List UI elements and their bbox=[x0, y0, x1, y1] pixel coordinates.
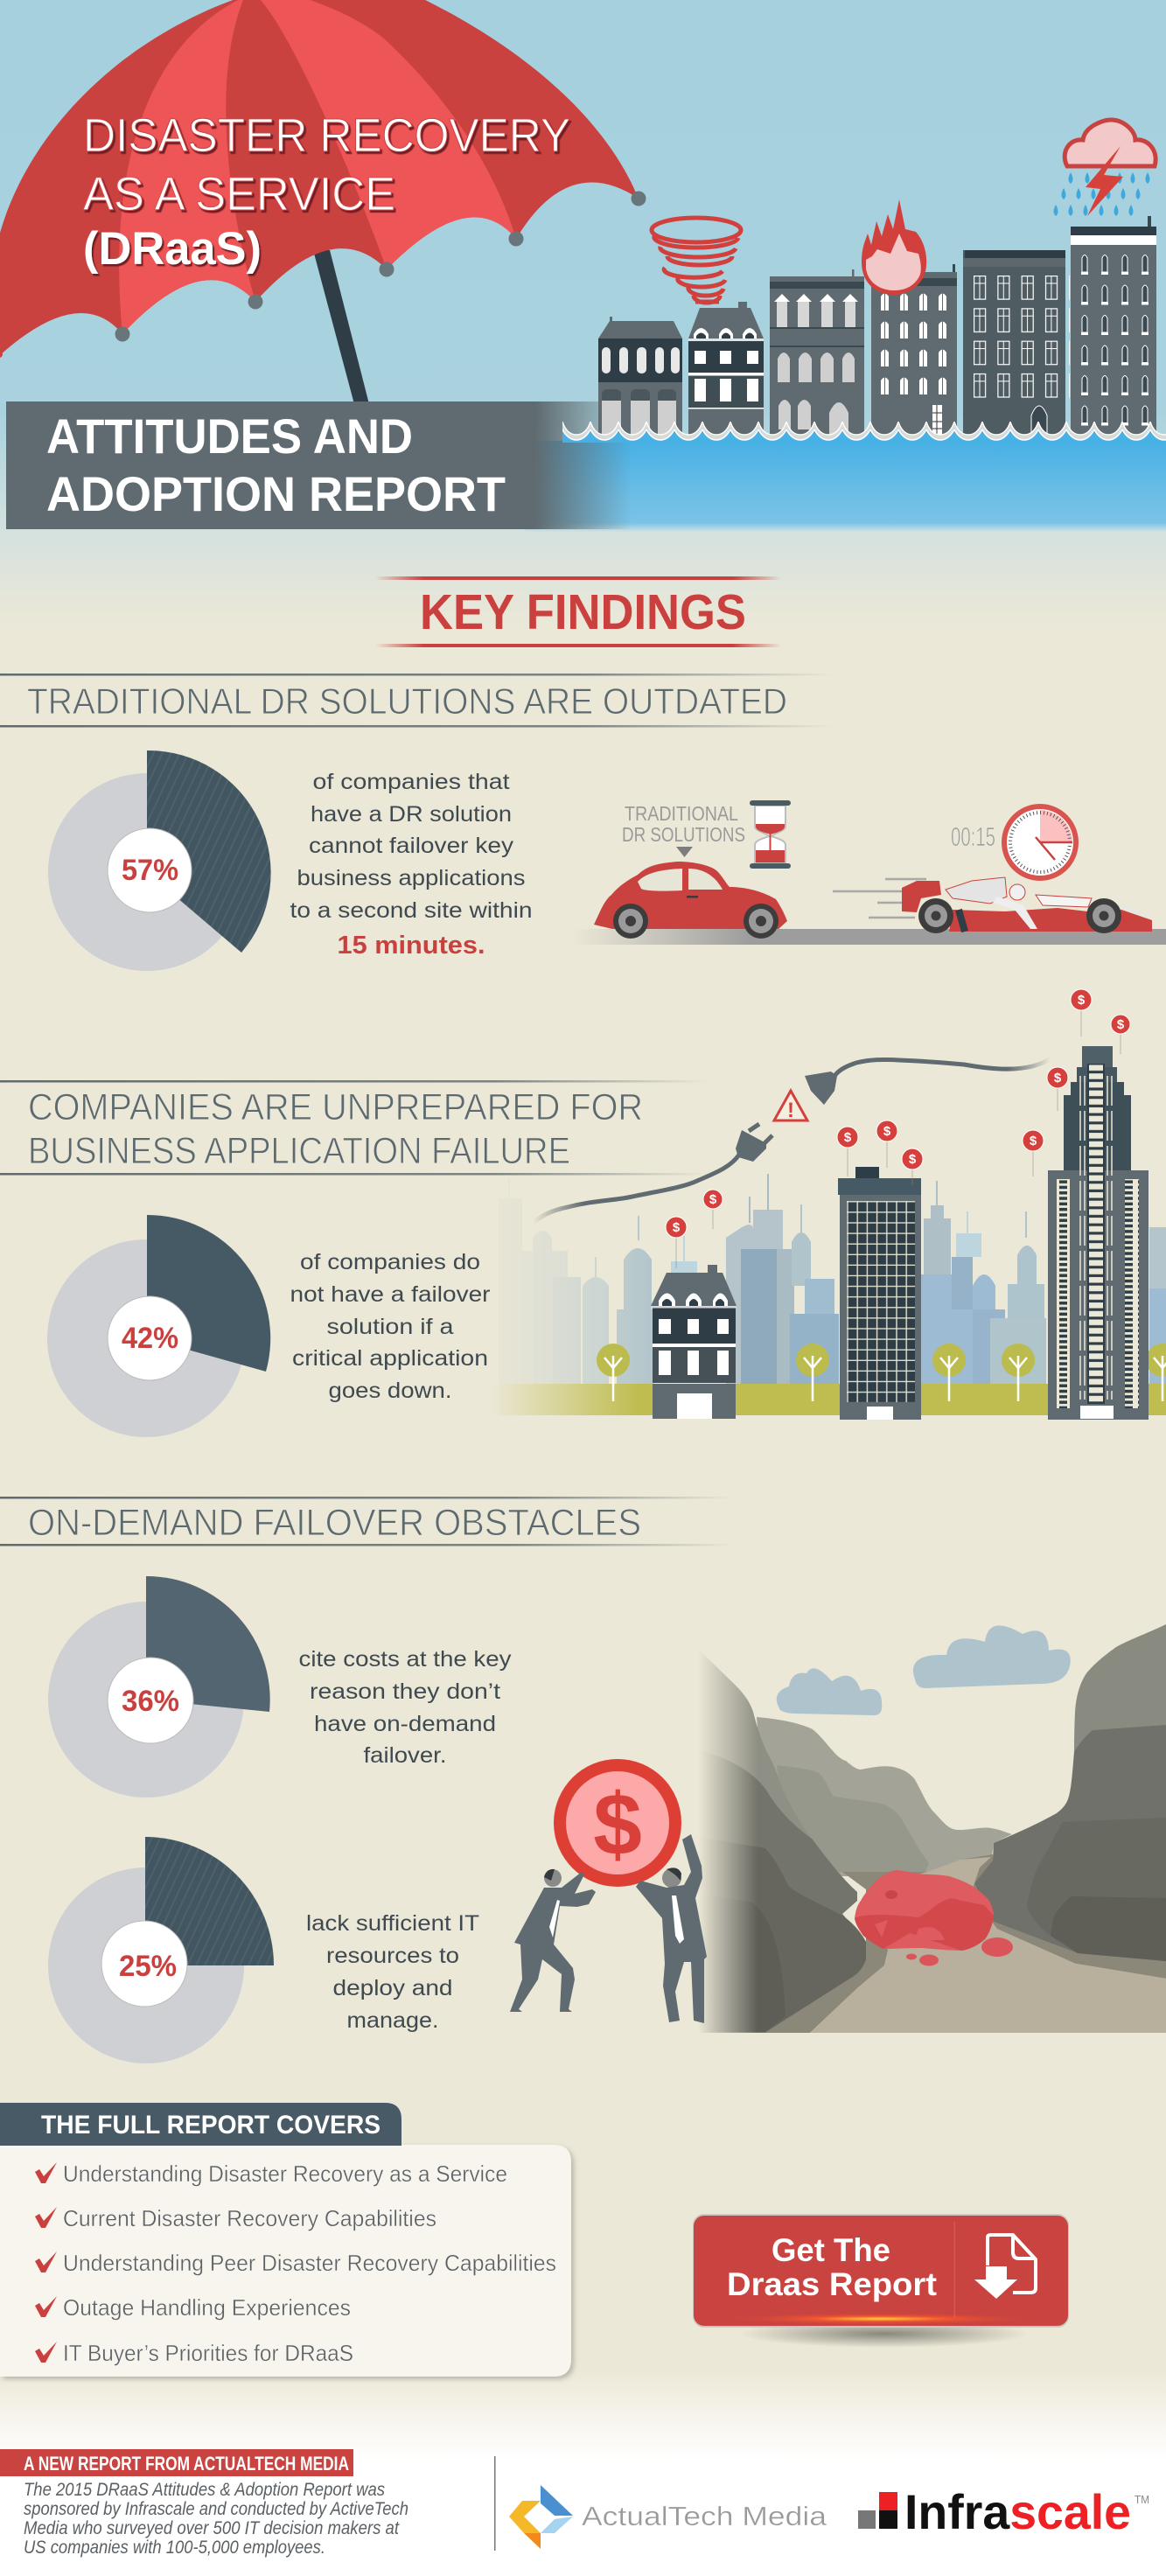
footer text: US companies with 100-5,000 employees. bbox=[24, 2538, 325, 2558]
text: 42% description: goes down. bbox=[329, 1379, 451, 1403]
valley road bbox=[810, 1857, 1166, 2033]
falling dollar coins: $ bbox=[909, 1152, 917, 1167]
icon: hourglass bbox=[750, 800, 791, 869]
right canyon wall bbox=[974, 1624, 1166, 1961]
text: 25% description: lack sufficient IT bbox=[306, 1911, 479, 1936]
section heading: traditional DR solutions: TRADITIONAL DR SOLUTIONS ARE OUTDATED bbox=[27, 681, 787, 722]
far ridge bbox=[757, 1717, 1012, 1876]
person right bbox=[636, 1834, 707, 2023]
flood waves bbox=[562, 422, 1166, 443]
text: 57% description: of companies that bbox=[313, 770, 510, 794]
heading: key findings bbox=[375, 576, 781, 647]
icon: tornado bbox=[652, 218, 741, 303]
falling dollar coins: $ bbox=[1054, 1071, 1062, 1086]
clock readout: 00:15 bbox=[951, 821, 995, 852]
icon: stopwatch clock bbox=[1004, 806, 1076, 878]
building 2 bbox=[688, 302, 764, 439]
icon: unplugged cable upper bbox=[805, 1058, 1051, 1105]
icon: red beetle car bbox=[594, 862, 787, 939]
pie chart: 57%: 57% bbox=[122, 854, 178, 887]
icon: race car with speed lines bbox=[833, 877, 1152, 933]
banner text: ATTITUDES AND bbox=[46, 408, 413, 464]
falling dollar coins bbox=[666, 989, 1130, 1268]
text: 36% description: failover. bbox=[364, 1743, 446, 1768]
logo: ActualTech Media: ActualTech Media bbox=[582, 2501, 827, 2531]
icon: fire bbox=[862, 199, 926, 295]
text: 42% description bbox=[290, 1250, 490, 1403]
title: Disaster Recovery as a Service (DRaaS) bbox=[83, 109, 570, 275]
text: 42% description: of companies do bbox=[300, 1250, 480, 1274]
footer banner bbox=[0, 2449, 353, 2476]
footer text: Media who surveyed over 500 IT decision makers at bbox=[24, 2518, 400, 2538]
grass strip bbox=[490, 1384, 1166, 1415]
pie chart: 36%: 36% bbox=[122, 1685, 179, 1718]
text: 36% description: reason they don’t bbox=[310, 1679, 500, 1704]
falling dollar coins: $ bbox=[844, 1130, 852, 1145]
building 6 bbox=[1071, 216, 1156, 439]
text: 57% description: to a second site within bbox=[290, 898, 532, 923]
building: office tower bbox=[838, 1167, 921, 1420]
pie chart: 42% bbox=[47, 1215, 270, 1437]
pie chart: 36% bbox=[48, 1576, 270, 1798]
falling dollar coins: $ bbox=[673, 1220, 681, 1235]
pie chart: 25% bbox=[48, 1837, 274, 2063]
text: 25% description: resources to bbox=[326, 1944, 459, 1968]
divider bbox=[494, 2456, 495, 2551]
heading: key findings: KEY FINDINGS bbox=[420, 584, 746, 640]
text: 57% description: have a DR solution bbox=[311, 802, 512, 827]
text: 25% description: manage. bbox=[346, 2008, 439, 2033]
background city skyline bbox=[499, 1174, 1166, 1384]
text: 57% description: 15 minutes. bbox=[338, 932, 485, 960]
section heading: on-demand failover obstacles: ON-DEMAND FAILOVER OBSTACLES bbox=[28, 1502, 641, 1544]
footer text: The 2015 DRaaS Attitudes & Adoption Report was bbox=[24, 2480, 385, 2500]
falling dollar coins: $ bbox=[883, 1124, 891, 1139]
text: 42% description: critical application bbox=[292, 1346, 488, 1371]
icon: warning triangle bbox=[774, 1091, 807, 1122]
banner text: ADOPTION REPORT bbox=[46, 466, 506, 521]
text: 36% description: cite costs at the key bbox=[299, 1647, 512, 1672]
label: traditional DR solutions: TRADITIONAL bbox=[625, 802, 738, 825]
button: get the draas report: Get The bbox=[772, 2232, 890, 2268]
section heading: companies are unprepared: BUSINESS APPLICATION FAILURE bbox=[28, 1130, 570, 1172]
icon: people lifting dollar coin: $ bbox=[593, 1776, 642, 1874]
road bbox=[573, 929, 1166, 945]
wall fade bbox=[696, 1644, 759, 2034]
text: 25% description: deploy and bbox=[332, 1976, 453, 2000]
button: get the draas report: Draas Report bbox=[727, 2266, 937, 2302]
cloud right bbox=[913, 1625, 1071, 1688]
text: 57% description: cannot failover key bbox=[309, 834, 514, 858]
mid ridge bbox=[777, 1765, 929, 1872]
falling dollar coins: $ bbox=[1030, 1134, 1037, 1148]
button: get the draas report bbox=[693, 2214, 1069, 2348]
left canyon wall bbox=[698, 1649, 866, 2033]
building: skyscraper bbox=[1048, 1046, 1149, 1420]
title: Disaster Recovery as a Service (DRaaS): DISASTER RECOVERY bbox=[83, 109, 570, 162]
check list: Understanding Disaster Recovery as a Service bbox=[63, 2161, 507, 2187]
check list: Outage Handling Experiences bbox=[63, 2294, 351, 2321]
text: 36% description: have on-demand bbox=[314, 1712, 496, 1736]
logo: Infrascale: Infrascale bbox=[904, 2484, 1131, 2539]
red boulder bbox=[855, 1870, 1013, 1966]
building 4 bbox=[871, 264, 957, 439]
icon: download document bbox=[974, 2235, 1036, 2299]
illustration: canyon with clouds and boulder bbox=[696, 1624, 1166, 2034]
title: Disaster Recovery as a Service (DRaaS): AS A SERVICE bbox=[83, 168, 395, 220]
text: 25% description bbox=[306, 1911, 479, 2033]
valley road edge bbox=[765, 1854, 1166, 2033]
icon: storm cloud with rain and lightning bbox=[1053, 120, 1156, 216]
falling dollar coins: $ bbox=[709, 1192, 717, 1207]
person left bbox=[510, 1869, 596, 2012]
icon: red umbrella bbox=[0, 0, 646, 404]
pie chart: 25%: 25% bbox=[119, 1950, 177, 1983]
banner text bbox=[46, 408, 506, 521]
text: 42% description: solution if a bbox=[327, 1315, 454, 1339]
pie chart: 42%: 42% bbox=[122, 1322, 178, 1355]
tab heading: THE FULL REPORT COVERS bbox=[41, 2111, 381, 2140]
icon: unplugged cable lower bbox=[533, 1124, 772, 1223]
cloud left bbox=[777, 1668, 882, 1715]
banner: attitudes and adoption report bbox=[6, 401, 632, 529]
text: 42% description: not have a failover bbox=[290, 1282, 490, 1307]
footer text: sponsored by Infrascale and conducted by ActiveTech bbox=[24, 2499, 408, 2519]
trees bbox=[597, 1344, 1166, 1401]
flood water bbox=[525, 441, 1166, 532]
footer text bbox=[24, 2480, 408, 2558]
text: 36% description bbox=[299, 1647, 512, 1768]
footer banner: A NEW REPORT FROM ACTUALTECH MEDIA bbox=[24, 2453, 349, 2475]
falling dollar coins: $ bbox=[1078, 993, 1086, 1008]
section heading: companies are unprepared bbox=[0, 1080, 707, 1176]
check list bbox=[35, 2161, 556, 2366]
building 1 bbox=[598, 317, 682, 439]
check list: IT Buyer’s Priorities for DRaaS bbox=[63, 2340, 353, 2366]
logo: ActualTech Media bbox=[509, 2485, 827, 2549]
section heading: companies are unprepared: COMPANIES ARE UNPREPARED FOR bbox=[28, 1086, 643, 1128]
building: townhouse bbox=[651, 1265, 737, 1419]
panel: the full report covers bbox=[0, 2103, 571, 2377]
pie chart: 57% bbox=[48, 750, 271, 971]
tab heading bbox=[0, 2103, 401, 2146]
building 5 bbox=[963, 250, 1070, 439]
title: Disaster Recovery as a Service (DRaaS): (DRaaS) bbox=[83, 223, 262, 275]
check list: Current Disaster Recovery Capabilities bbox=[63, 2205, 436, 2231]
icon: warning triangle: ! bbox=[787, 1099, 794, 1122]
label: traditional DR solutions bbox=[622, 802, 745, 857]
label: traditional DR solutions: DR SOLUTIONS bbox=[622, 823, 745, 846]
logo: Infrascale: TM bbox=[1135, 2493, 1149, 2506]
check list: Understanding Peer Disaster Recovery Capabilities bbox=[63, 2250, 556, 2276]
icon: people lifting dollar coin bbox=[510, 1759, 707, 2023]
building 3 bbox=[770, 269, 864, 439]
falling dollar coins: $ bbox=[1117, 1017, 1125, 1032]
text: 57% description bbox=[290, 770, 532, 960]
text: 57% description: business applications bbox=[297, 866, 525, 890]
